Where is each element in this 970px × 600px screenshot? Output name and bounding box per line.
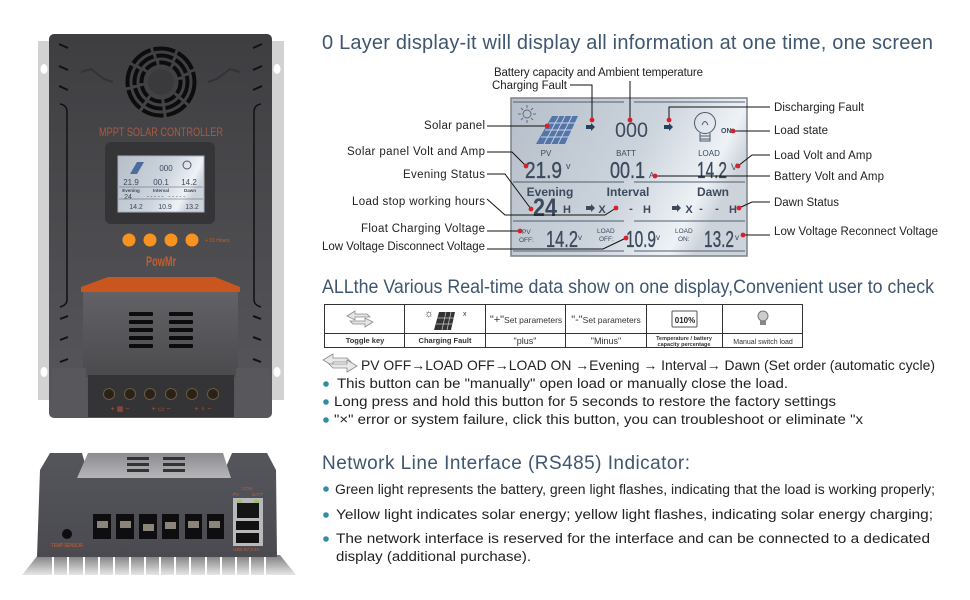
table grid: [324, 304, 802, 348]
icon: toggle key: [347, 311, 373, 327]
table row labels: Charging Fault: [419, 336, 472, 345]
voltage row: OFF:: [599, 236, 614, 243]
product photo: controller front: [38, 34, 284, 418]
LCD diagram: [322, 67, 938, 256]
fan grille: [128, 48, 194, 116]
button instructions: "×" error or system failure, click this button, you can troubleshoot or eliminate "x: [334, 412, 863, 427]
voltage row: LOAD: [675, 228, 693, 235]
cycle order text: PV OFF→LOAD OFF→LOAD ON →Evening → Interval→ Dawn (Set order (automatic cycle): [361, 357, 935, 373]
callout labels: left: Load stop working hours: [352, 196, 485, 208]
top vents: [127, 457, 185, 472]
set parameter labels: [490, 314, 641, 326]
readings row: 21.9: [525, 157, 562, 183]
heading: real-time data: ALLthe Various Real-time data show on one display,Convenient user to check: [322, 277, 934, 298]
column labels: PV: [541, 149, 552, 158]
key table: [324, 304, 802, 348]
small LCD screen: 10.9: [158, 204, 172, 211]
small LCD screen: - - - - - - - - - -: [147, 194, 185, 200]
set parameter labels: "+"Set parameters: [490, 314, 562, 326]
controller body: [49, 34, 272, 418]
leader lines: [487, 81, 770, 249]
callout labels: right: [774, 102, 938, 238]
readings row: 00.1: [610, 157, 645, 183]
icon: toggle arrows: [323, 354, 357, 372]
icon: sun: [518, 105, 536, 123]
vent slots: [129, 312, 193, 348]
voltage row: 14.2: [546, 226, 578, 252]
voltage row: v: [656, 233, 660, 242]
brand logo: PowMr: [146, 253, 176, 269]
small LCD screen: [118, 156, 204, 212]
red markers: [518, 118, 745, 240]
voltage row: 10.9: [626, 226, 656, 252]
voltage row: PV: [522, 229, 531, 236]
set parameter labels: "-"Set parameters: [571, 314, 641, 326]
callout labels: right: Dawn Status: [774, 197, 839, 209]
network and USB ports: [233, 486, 263, 552]
small LCD screen: 00.1: [153, 178, 169, 187]
readings row: A: [649, 171, 655, 180]
small LCD screen: 21.9: [123, 178, 139, 187]
period values: [533, 194, 737, 222]
voltage row: 13.2: [704, 226, 734, 252]
rear housing: [37, 453, 277, 557]
mounting brackets: [38, 41, 284, 400]
icon: charging fault: x: [463, 311, 467, 318]
network indicator notes: display (additional purchase).: [336, 549, 531, 564]
terminal screws and symbols: + ▭ −: [152, 406, 170, 413]
callout labels: right: Low Voltage Reconnect Voltage: [774, 226, 938, 238]
voltage row: v: [578, 233, 582, 242]
network and USB ports: BATT: [252, 492, 263, 497]
period values: X: [685, 204, 693, 216]
small LCD screen: 14.2: [181, 178, 197, 187]
callout labels: left: Solar panel Volt and Amp: [347, 146, 485, 158]
icon: bulb: [694, 112, 716, 141]
heading: network interface: Network Line Interface (RS485) Indicator:: [322, 453, 690, 474]
load on label: ON: [721, 128, 732, 135]
period values: H: [643, 204, 651, 216]
period labels: Interval: [607, 185, 649, 199]
period labels: Evening: [527, 185, 573, 199]
LCD panel: [511, 98, 747, 256]
period values: H: [729, 204, 737, 216]
terminal screws and symbols: [104, 388, 218, 413]
period values: -: [699, 203, 703, 215]
network indicator notes: Green light represents the battery, green light flashes, indicating that the load is working properly;: [335, 482, 935, 497]
readings row: V: [731, 162, 737, 172]
network and USB ports: USB 5V 2.4A: [233, 547, 260, 552]
readings row: 14.2: [697, 157, 727, 183]
display bezel: [105, 142, 215, 224]
terminal screws and symbols: + ▦ −: [111, 406, 129, 413]
button instructions: [323, 376, 863, 427]
terminal screws and symbols: + ♀ −: [194, 406, 212, 413]
callout labels: left: Float Charging Voltage: [361, 223, 485, 235]
callout labels: left: [322, 120, 485, 253]
orange buttons: [122, 234, 230, 246]
callout labels: right: Battery Volt and Amp: [774, 171, 884, 183]
small LCD screen: 14.2: [129, 204, 143, 211]
callout labels: top: [492, 67, 703, 92]
network indicator notes: [323, 482, 935, 564]
network indicator notes: The network interface is reserved for the interface and can be connected to a dedicated: [336, 531, 930, 546]
column labels: BATT: [616, 149, 636, 158]
table row labels: capacity percentage: [658, 342, 710, 348]
voltage row: ON:: [678, 236, 690, 243]
small LCD screen: Evening: [122, 188, 140, 193]
period labels: [527, 185, 729, 199]
voltage row: OFF:: [519, 237, 534, 244]
icon: temperature display: 010%: [675, 316, 695, 325]
readings row: v: [566, 161, 571, 171]
callout labels: right: Load state: [774, 125, 828, 137]
button instructions: Long press and hold this button for 5 seconds to restore the factory settings: [334, 394, 836, 409]
period values: -: [715, 203, 719, 215]
icon: temperature display: [672, 311, 697, 327]
lower panel: [83, 292, 238, 377]
callout labels: right: Discharging Fault: [774, 102, 865, 114]
icon: load switch: [758, 311, 768, 325]
small LCD screen: 000: [159, 164, 173, 173]
column labels: [541, 149, 720, 158]
icon: fault arrows: [586, 123, 673, 131]
callout labels: right: Load Volt and Amp: [774, 150, 872, 162]
title: layer display: 0 Layer display-it will display all information at one time, one screen: [322, 32, 933, 54]
table row labels: Temperature / battery: [656, 336, 713, 342]
top plate: [77, 453, 231, 478]
network indicator notes: Yellow light indicates solar energy; yellow light flashes, indicating solar energy charging;: [336, 507, 933, 522]
icon: solar panel: [536, 116, 578, 144]
period values: H: [563, 204, 571, 216]
small LCD screen: 13.2: [185, 204, 199, 211]
voltage row: [519, 226, 739, 252]
callout labels: top: Battery capacity and Ambient temperature: [494, 67, 703, 79]
network and USB ports: PV: [233, 492, 239, 497]
callout labels: left: Evening Status: [403, 169, 485, 181]
callout labels: top: Charging Fault: [492, 80, 568, 92]
LCD divider lines: [513, 102, 745, 251]
callout labels: left: Low Voltage Disconnect Voltage: [322, 241, 485, 253]
terminal well: [88, 375, 234, 417]
small LCD screen: 24: [124, 194, 132, 201]
product photo: controller rear: [22, 453, 296, 575]
battery capacity digits: 000: [615, 119, 648, 142]
table row labels: "plus": [514, 336, 536, 346]
icon: charging fault: ☼: [424, 308, 434, 320]
side vent marks: [59, 44, 262, 362]
readings row: [525, 157, 737, 183]
callout labels: left: Solar panel: [424, 120, 485, 132]
product name: MPPT SOLAR CONTROLLER: [99, 127, 223, 139]
period labels: Dawn: [697, 185, 729, 199]
temp sensor port: TEMP SENSOR: [51, 543, 83, 549]
period values: 24: [533, 194, 557, 222]
voltage row: v: [735, 233, 739, 242]
period values: X: [598, 204, 606, 216]
table row labels: [346, 336, 793, 348]
temp sensor port: [51, 529, 83, 549]
table row labels: Toggle key: [346, 336, 385, 345]
orange buttons: + 15 Hours: [205, 238, 230, 244]
heat sink: [22, 555, 296, 575]
network and USB ports: COM: [242, 486, 253, 491]
period values: -: [629, 203, 633, 215]
orange band: [81, 277, 240, 292]
small LCD screen: Dawn: [184, 188, 196, 193]
column labels: LOAD: [698, 149, 720, 158]
table row labels: "Minus": [591, 336, 621, 346]
corner blocks: [52, 368, 270, 417]
terminal slots: [93, 514, 224, 539]
table row labels: Manual switch load: [733, 339, 793, 346]
button instructions: This button can be "manually" open load or manually close the load.: [337, 376, 788, 391]
small LCD screen: Interval: [153, 188, 169, 193]
voltage row: LOAD: [597, 228, 615, 235]
icon: charging fault: [424, 308, 467, 330]
